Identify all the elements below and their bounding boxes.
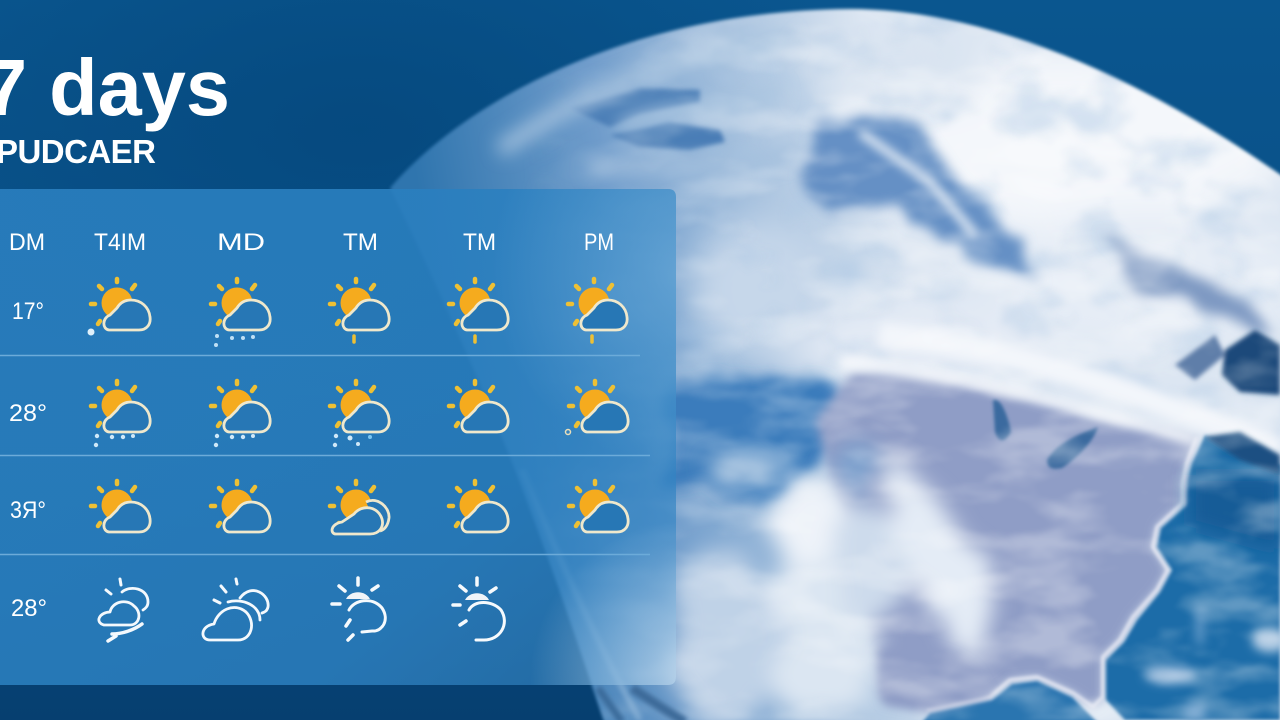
shadow streaks xyxy=(805,105,1275,340)
row dividers xyxy=(0,356,650,554)
row labels: temperatures: 17° xyxy=(12,298,44,325)
panel background xyxy=(0,189,676,685)
lower white clouds xyxy=(665,430,990,720)
icon: row 1 column 2, sun cloud with rain xyxy=(211,279,270,347)
icon: row 4 column 1, cloud with wind xyxy=(99,579,148,641)
icon: row 2 column 5, sun cloud with dot xyxy=(566,381,628,434)
land coast line xyxy=(927,437,1197,710)
icon: row 3 column 3, sun with double cloud xyxy=(330,481,389,534)
white noise texture xyxy=(569,14,1280,720)
lower limb band and dark streaks xyxy=(551,539,689,720)
icon: row 4 column 2, double cloud xyxy=(203,579,268,640)
subtitle: PUDCAER xyxy=(0,133,156,170)
white filament over shadow xyxy=(860,132,975,235)
column headers: DM xyxy=(9,229,45,256)
column headers: TM xyxy=(343,229,378,256)
icon: row 1 column 5, sun cloud xyxy=(568,279,627,342)
icon: row 4 column 4, half sun with arc xyxy=(453,578,504,640)
column headers: T4IM xyxy=(94,229,146,256)
earth globe with clouds xyxy=(390,6,1280,720)
panel highlights xyxy=(0,189,676,685)
icon: row 3 column 4, sun cloud xyxy=(449,481,508,532)
icon: row 2 column 4, sun cloud xyxy=(449,381,508,432)
white jet stream xyxy=(840,335,1280,450)
purple shade under clouds xyxy=(880,646,990,710)
icon: row 4 column 3, half sun with arc xyxy=(332,578,385,640)
cloud mass: upper right xyxy=(690,35,1280,380)
blue patches: upper left xyxy=(570,88,725,150)
land mass xyxy=(815,372,1197,710)
lakes xyxy=(993,399,1098,469)
dark storm top right xyxy=(1175,330,1280,475)
blue middle band xyxy=(670,376,839,505)
icon: row 2 column 2, sun cloud with rain xyxy=(211,381,270,447)
icon: row 1 column 1, sun cloud with drop xyxy=(88,279,150,336)
icon: row 3 column 5, sun cloud xyxy=(569,481,628,532)
column headers: MD xyxy=(217,229,265,256)
icon: row 3 column 1, sun cloud xyxy=(91,481,150,532)
ocean bottom xyxy=(920,681,1100,720)
column headers: TM xyxy=(463,229,496,256)
light filaments: upper left xyxy=(500,40,800,170)
icon: row 1 column 4, sun cloud xyxy=(449,279,508,342)
icon: row 3 column 2, sun cloud xyxy=(211,481,270,532)
ocean right xyxy=(1106,435,1280,720)
row labels: temperatures xyxy=(9,298,47,622)
panel: forecast table xyxy=(0,189,676,685)
column headers xyxy=(9,229,614,256)
icon: row 2 column 1, sun cloud with rain xyxy=(91,381,150,447)
icon: row 2 column 3, sun cloud with rain xyxy=(330,381,389,447)
blue noise texture xyxy=(676,14,1278,408)
icon: row 1 column 3, sun cloud xyxy=(330,279,389,342)
row labels: temperatures: 28° xyxy=(11,595,47,622)
ocean clouds xyxy=(1144,603,1280,720)
row labels: temperatures: 3Я° xyxy=(10,497,46,524)
row labels: temperatures: 28° xyxy=(9,400,47,427)
column headers: PM xyxy=(584,229,614,256)
